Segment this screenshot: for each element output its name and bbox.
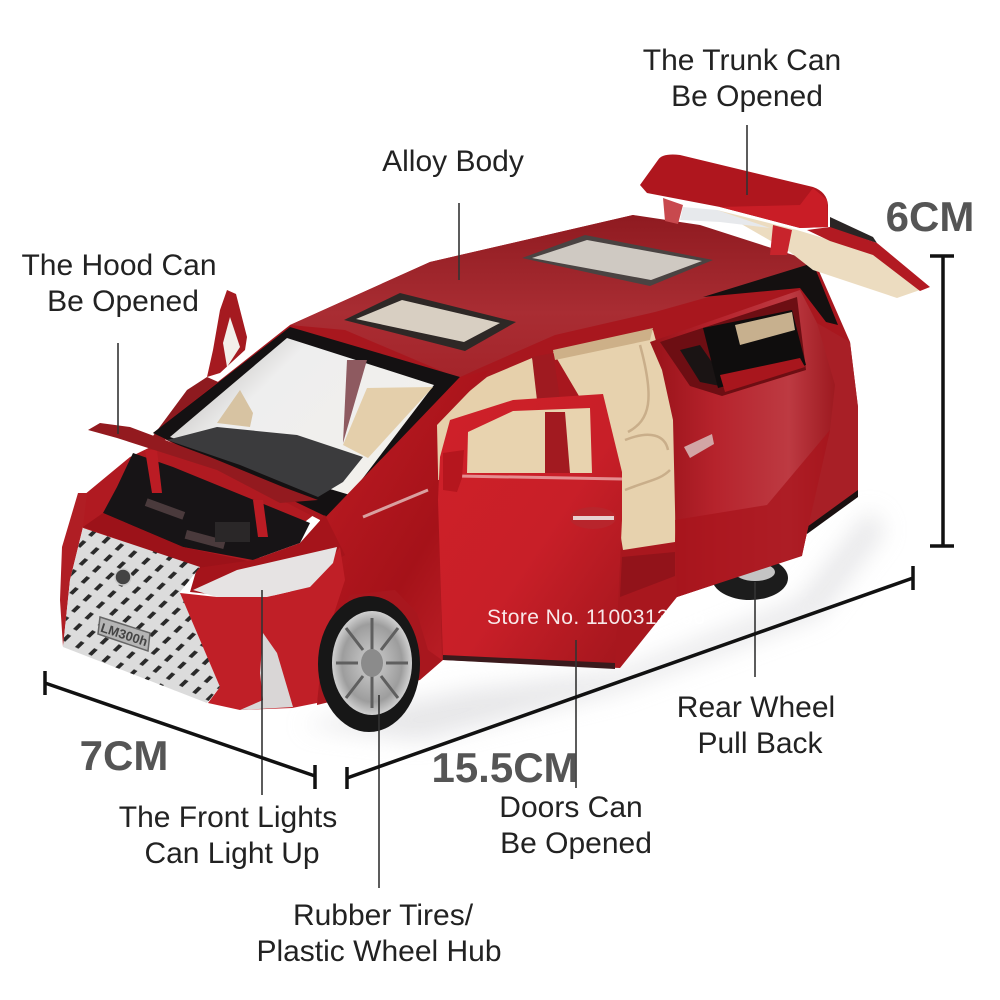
leader: hood: [117, 343, 119, 434]
door handle: [570, 507, 616, 529]
ground shadow: [300, 510, 885, 740]
chrome grille: [63, 528, 220, 703]
label: The Trunk Can Be Opened: The Trunk Can: [643, 44, 841, 77]
trunk gap to sky: [680, 207, 770, 228]
left mirror and cowl: [150, 377, 225, 440]
door window: [467, 408, 592, 473]
trunk window and frame: [807, 217, 930, 291]
left front body behind hood: [78, 440, 320, 570]
door belt highlight: [457, 476, 622, 479]
windshield glass: [170, 338, 434, 495]
sliding door window: [660, 297, 806, 396]
label: The Front Lights Can Light Up: The Front Lights: [119, 801, 337, 834]
door sill: [443, 655, 615, 669]
sliding door: [650, 290, 835, 597]
label: The Hood Can Be Opened: Be Opened: [47, 285, 199, 318]
b-pillar: [532, 353, 571, 470]
leader: alloy body: [458, 203, 460, 280]
rear black glass: [703, 263, 838, 325]
label: The Hood Can Be Opened: The Hood Can: [21, 249, 217, 282]
engine details: [145, 498, 250, 549]
label: Rubber Tires / Plastic Wheel Hub: Rubber Tires/: [293, 899, 474, 932]
label: The Front Lights Can Light Up: Can Light Up: [144, 837, 320, 870]
dimension: height 6CM: [886, 193, 974, 546]
dimension: length 15.5CM: [347, 566, 913, 791]
interior rear cabin: [553, 330, 677, 550]
trunk spoiler shade: [720, 188, 828, 228]
hood struts: [145, 450, 268, 537]
front bumper: [180, 547, 345, 710]
trunk spoiler: [640, 155, 828, 228]
chrome grille: LM300h: [99, 620, 150, 649]
trunk struts: [663, 198, 792, 255]
sunroof front: [344, 293, 516, 351]
fender and a-pillar: [290, 370, 490, 703]
label: Doors Can Be Opened: Be Opened: [500, 827, 652, 860]
mirror: [443, 450, 464, 492]
rocker panel: [620, 552, 675, 597]
leader: tires: [378, 695, 380, 888]
label: Doors Can Be Opened: Doors Can: [499, 791, 643, 824]
main body: [153, 215, 858, 705]
open hood: [88, 423, 318, 503]
leader: front lights: [261, 590, 263, 795]
sliding door fold: [675, 430, 830, 597]
front bumper left edge: [60, 493, 87, 647]
trunk lid interior: [717, 210, 920, 298]
front wheel: [318, 596, 420, 732]
rear quarter: [807, 323, 858, 532]
fender stripe: [363, 490, 428, 517]
label: Rear Wheel Pull Back: Pull Back: [697, 727, 824, 760]
dimension: width 7CM: 7CM: [80, 732, 168, 779]
label: Rear Wheel Pull Back: Rear Wheel: [677, 691, 835, 724]
leader: doors: [575, 640, 577, 788]
sunroof rear: [522, 235, 713, 286]
rear wheel: [712, 556, 788, 600]
sliding door handle: [684, 434, 714, 458]
pillar through door window: [545, 412, 570, 473]
leader: rear wheel: [754, 582, 756, 677]
toy van illustration: [60, 155, 930, 740]
cowl below headlight: [190, 515, 345, 600]
headlight: [193, 547, 337, 597]
leader: trunk: [746, 125, 748, 195]
windshield frame: [153, 327, 460, 517]
interior front cabin: [434, 358, 560, 480]
watermark: Store No. 1100313066: [487, 606, 705, 629]
dimension: height 6CM: 6CM: [886, 193, 974, 240]
rear seat folds: [625, 345, 670, 490]
pillar through windshield: [343, 360, 367, 443]
left door behind windshield: [207, 290, 247, 377]
label: The Trunk Can Be Opened: Be Opened: [671, 80, 823, 113]
roof: [290, 215, 815, 378]
fog light: [240, 633, 293, 710]
seat through windshield: [343, 387, 433, 458]
open front door: [438, 394, 622, 668]
rear bumper dark strip: [807, 490, 858, 534]
label: Rubber Tires / Plastic Wheel Hub: Plastic Wheel Hub: [256, 935, 502, 968]
engine bay: [103, 453, 310, 560]
dimension: length 15.5CM: 15.5CM: [431, 744, 579, 791]
hood top surface: [83, 513, 253, 575]
far seat through windshield: [217, 390, 253, 427]
dashboard: [167, 427, 363, 497]
label: Alloy Body: Alloy Body: [382, 145, 524, 178]
dimension: width 7CM: [45, 671, 315, 789]
interior overhead bar: [553, 328, 653, 360]
